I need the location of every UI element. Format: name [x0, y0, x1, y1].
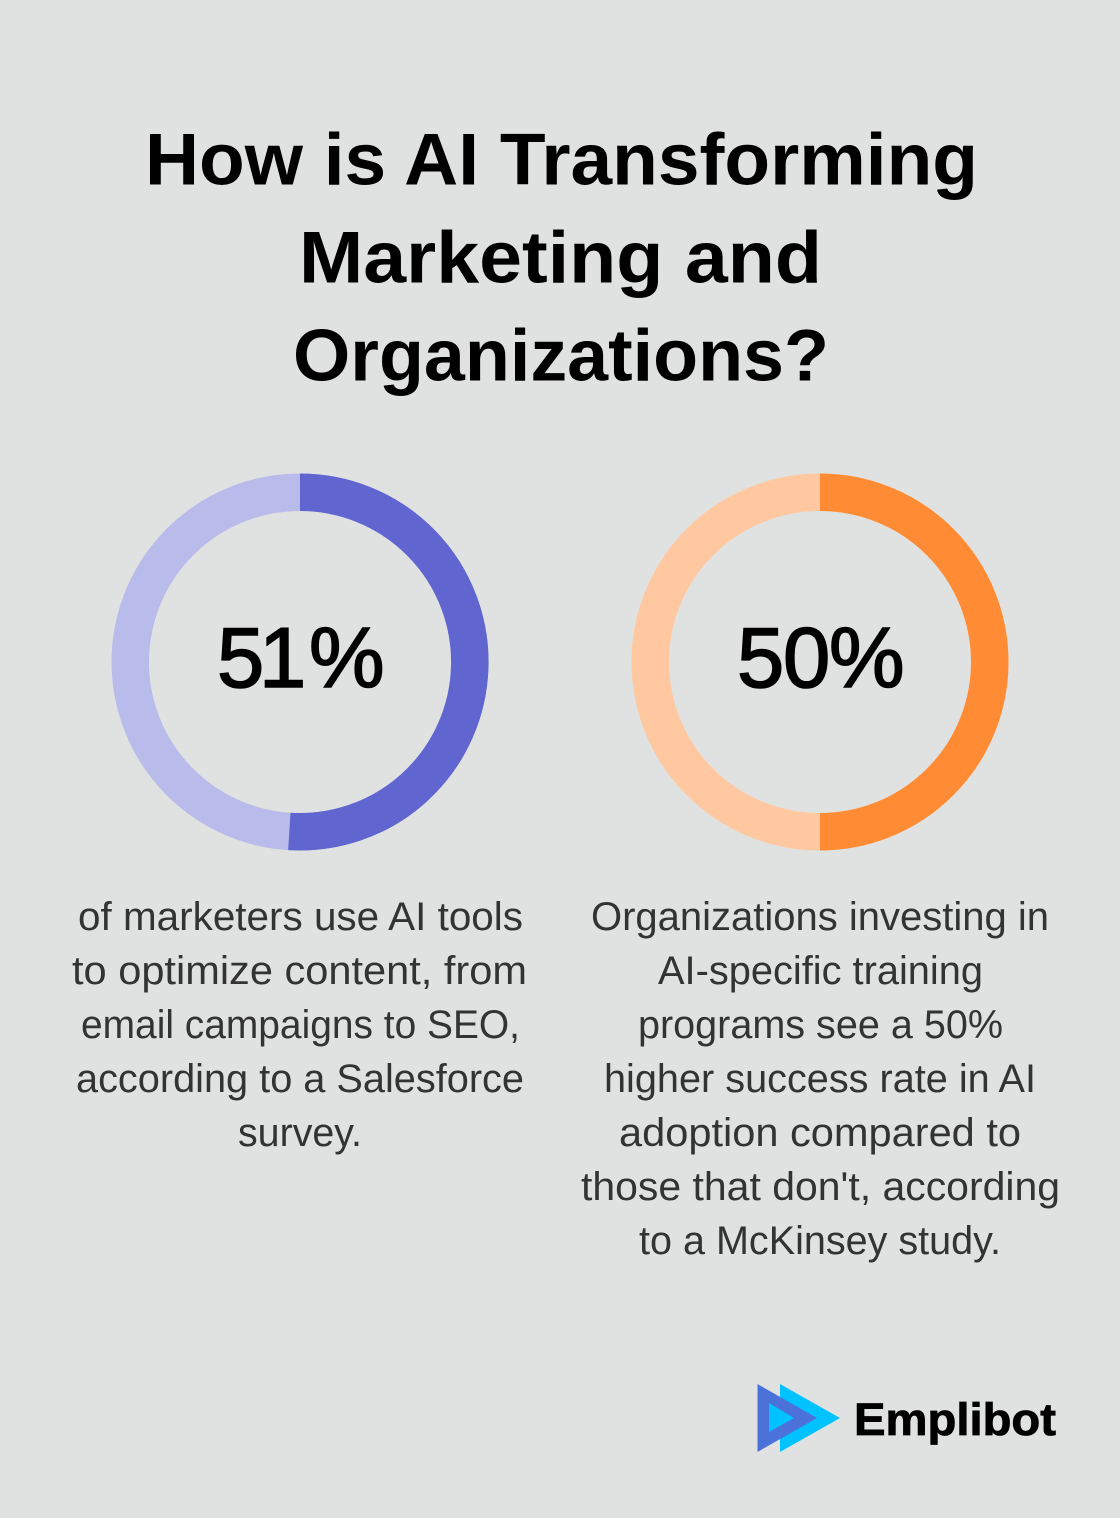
donut chart: 51% [130, 492, 470, 832]
text block: marketers statistic: to optimize content, from [72, 949, 527, 993]
logo: Emplibot [758, 1384, 1056, 1452]
donut chart: 50%: 50% [737, 611, 905, 706]
text block: organizations statistic: to a McKinsey study. [639, 1219, 1001, 1263]
text block: organizations statistic: adoption compared to [619, 1111, 1021, 1155]
title: Marketing and [299, 218, 822, 298]
donut chart: 51%: 51% [217, 611, 385, 706]
title [145, 120, 978, 396]
title: Organizations? [293, 316, 829, 396]
text block: organizations statistic: those that don't, according [581, 1165, 1060, 1209]
text block: organizations statistic: AI-specific training [658, 949, 983, 993]
wordmark: Emplibot [854, 1394, 1056, 1445]
text block: organizations statistic: higher success rate in AI [604, 1057, 1036, 1101]
icon: play triangles [758, 1384, 840, 1452]
text block: organizations statistic: Organizations investing in [591, 895, 1049, 939]
text block: organizations statistic: programs see a 50% [638, 1003, 1003, 1047]
text block: marketers statistic: according to a Salesforce [76, 1057, 524, 1101]
donut chart: 50% [650, 492, 990, 832]
text block: organizations statistic [581, 895, 1060, 1263]
text block: marketers statistic [72, 895, 527, 1155]
text block: marketers statistic: email campaigns to SEO, [81, 1003, 520, 1047]
text block: marketers statistic: survey. [238, 1111, 362, 1155]
title: How is AI Transforming [145, 120, 978, 200]
text block: marketers statistic: of marketers use AI tools [78, 895, 523, 939]
